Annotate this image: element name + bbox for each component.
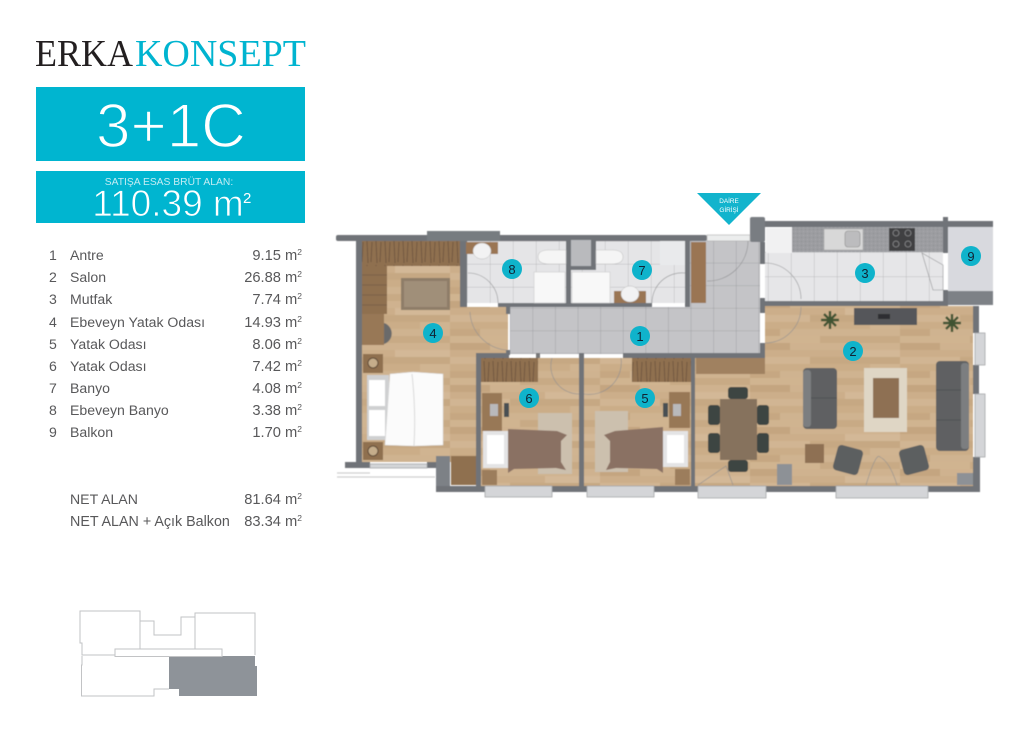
side table [805, 444, 824, 463]
bathroom toilet [596, 250, 623, 264]
room area list: Yatak Odası [70, 358, 147, 374]
room area list: 2 [297, 269, 302, 279]
net area totals [70, 491, 302, 530]
net area totals: 2 [297, 491, 302, 501]
room number markers: 7 [638, 263, 646, 278]
plan drawing [336, 217, 993, 498]
room area list: 7 [49, 380, 57, 396]
double bed [367, 375, 389, 440]
entrance door [707, 235, 750, 241]
entrance marker [697, 193, 761, 225]
title box: 3+1C: 3+1C [96, 92, 246, 161]
room area list: Ebeveyn Yatak Odası [70, 314, 205, 330]
room number markers: 3 [861, 266, 869, 281]
master bedroom furniture [362, 278, 450, 460]
room area list: 9 [49, 424, 57, 440]
logo: KONSEPT [135, 33, 306, 75]
sofa left [803, 368, 837, 429]
floor: living room [695, 306, 973, 486]
rug and coffee table [864, 368, 907, 432]
room number markers: 8 [508, 262, 516, 277]
room area list: 2 [297, 314, 302, 324]
floor: bedroom 6 [481, 358, 579, 486]
room area list: Banyo [70, 380, 110, 396]
room area list: 3.38 m [252, 403, 297, 419]
logo: ERKA [35, 33, 134, 75]
room number markers: 1 [636, 329, 644, 344]
floor: kitchen [765, 252, 943, 301]
room area list: Yatak Odası [70, 336, 147, 352]
room area list: Mutfak [70, 291, 113, 307]
area box: gross sale area: 110.39 m [92, 183, 244, 224]
entrance marker: GİRİŞİ [719, 205, 739, 214]
nightstands [363, 354, 383, 373]
room area list: 4.08 m [252, 381, 297, 397]
room number markers: 4 [429, 326, 437, 341]
windows [370, 333, 985, 498]
room area list: 1 [49, 247, 57, 263]
net area totals: 2 [297, 513, 302, 523]
room area list: 2 [49, 269, 57, 285]
wardrobes [362, 241, 765, 485]
room area list: 4 [49, 314, 57, 330]
room area list: 7.74 m [252, 292, 297, 308]
TV unit [854, 308, 917, 325]
desk and chair [362, 314, 384, 345]
rug [401, 278, 450, 310]
room area list: 2 [297, 336, 302, 346]
area box: gross sale area: SATIŞA ESAS BRÜT ALAN: [105, 176, 233, 188]
sofa right [936, 361, 969, 451]
room area list: 2 [297, 358, 302, 368]
room area list: 2 [297, 402, 302, 412]
room number markers [423, 246, 981, 408]
floor: bedroom 5 [584, 358, 691, 486]
room area list: 1.70 m [252, 425, 297, 441]
room number markers: 2 [849, 344, 857, 359]
room area list: 26.88 m [244, 270, 297, 286]
room area list: 7.42 m [252, 359, 297, 375]
floor: bathroom [571, 241, 685, 303]
floor: master bedroom [362, 241, 508, 462]
floor: entrance and corridor [510, 241, 760, 354]
living room furniture [777, 308, 973, 485]
room area list: Salon [70, 269, 106, 285]
armchairs [832, 444, 864, 476]
room area list [49, 247, 302, 441]
area box: gross sale area [36, 171, 305, 224]
room number markers: 9 [967, 249, 975, 264]
floor: balcony [948, 227, 993, 291]
balcony rail lines [337, 473, 435, 477]
kitchen counter [766, 227, 943, 253]
bedroom 5 furniture [595, 392, 690, 473]
room area list: 2 [297, 380, 302, 390]
room area list: Balkon [70, 424, 113, 440]
room area list: 8.06 m [252, 337, 297, 353]
hob [889, 228, 915, 251]
net area totals: 83.34 m [244, 514, 297, 530]
bathroom fixtures [466, 241, 685, 303]
bathroom shower tray [572, 272, 610, 303]
bedroom 6 furniture [482, 393, 572, 474]
room area list: 2 [297, 424, 302, 434]
entrance marker: DAİRE [719, 196, 739, 205]
room area list: 9.15 m [252, 248, 297, 264]
room area list: 6 [49, 358, 57, 374]
net area totals: NET ALAN [70, 491, 138, 507]
column and corner pier [777, 464, 792, 485]
walls [336, 217, 993, 492]
title box: 3+1C [36, 87, 305, 161]
dining set [708, 387, 769, 472]
floor plan [336, 193, 993, 498]
shaft between bathrooms [571, 240, 591, 266]
plants [821, 311, 961, 332]
room area list: 2 [297, 291, 302, 301]
room area list: Ebeveyn Banyo [70, 402, 169, 418]
net area totals: 81.64 m [244, 492, 297, 508]
room area list: Antre [70, 247, 104, 263]
en-suite basin [466, 242, 498, 254]
room area list: 8 [49, 402, 57, 418]
room area list: 3 [49, 291, 57, 307]
room area list: 5 [49, 336, 57, 352]
floor: en-suite bathroom [467, 241, 566, 303]
sink [824, 229, 863, 250]
room number markers: 5 [641, 391, 649, 406]
net area totals: NET ALAN + Açık Balkon [70, 514, 230, 530]
room area list: 2 [297, 247, 302, 257]
room area list: 14.93 m [244, 315, 297, 331]
en-suite toilet [538, 250, 566, 264]
area box: gross sale area: 2 [243, 190, 251, 207]
door swings [468, 241, 943, 485]
room number markers: 6 [525, 391, 533, 406]
key plan [80, 611, 257, 696]
en-suite shower tray [534, 272, 565, 303]
logo [35, 33, 306, 75]
bathroom basin [614, 291, 646, 303]
